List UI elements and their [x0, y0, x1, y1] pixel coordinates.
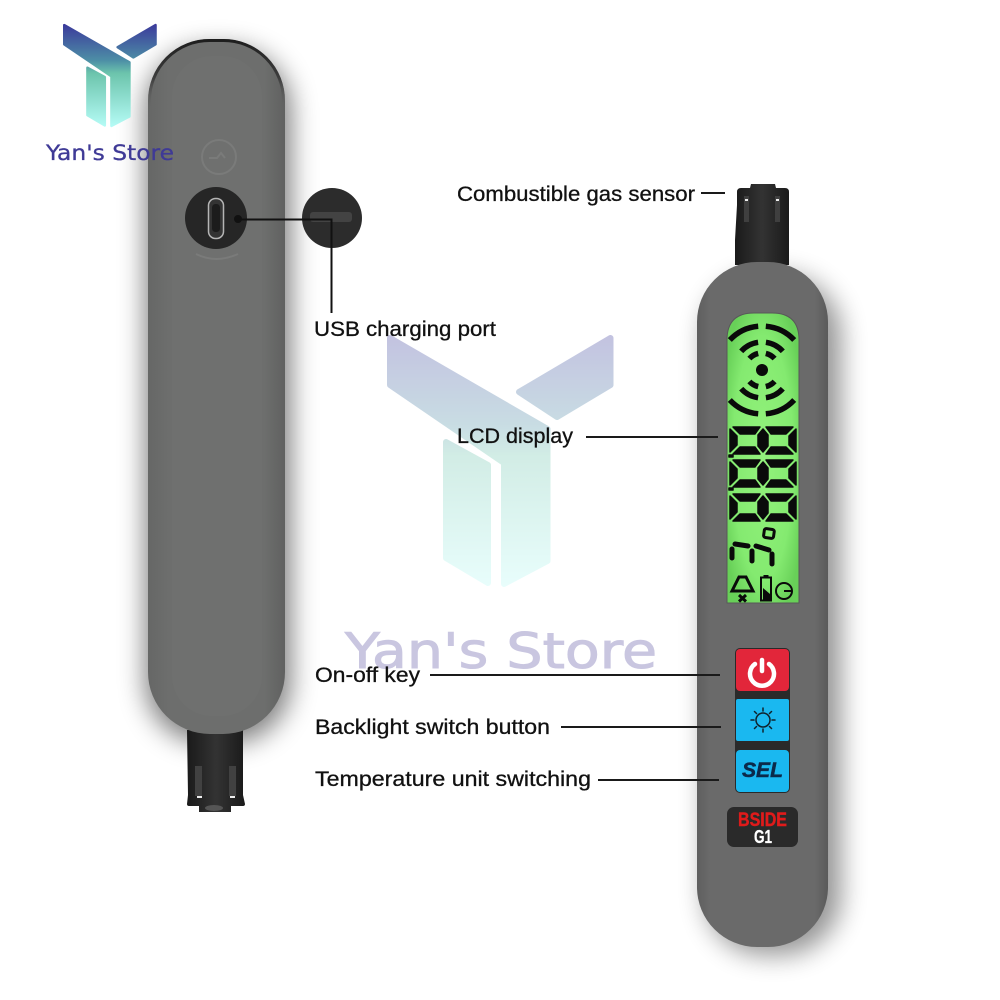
left device: back view	[145, 39, 291, 812]
backlight button	[736, 699, 789, 741]
icon: sun	[751, 708, 775, 732]
icon: muted bell	[732, 577, 753, 602]
left sensor tip	[187, 730, 245, 812]
watermark store name: Yan's Store	[344, 623, 657, 680]
left device body	[148, 39, 285, 734]
brand badge	[727, 807, 798, 847]
label: backlight switch button: Backlight switch button	[315, 716, 550, 739]
top sensor tip	[735, 184, 789, 265]
store logo	[64, 25, 156, 126]
icon: timer	[776, 583, 792, 599]
label: USB charging port: USB charging port	[314, 318, 496, 341]
button panel backing	[735, 648, 790, 793]
USB callout line	[234, 215, 332, 313]
USB port close-up circle	[302, 188, 362, 248]
watermark logo	[390, 338, 610, 584]
LCD screen	[727, 313, 799, 603]
right device: front view	[697, 184, 841, 955]
label: LCD display: LCD display	[457, 425, 574, 448]
store name: Yan's Store	[45, 141, 174, 165]
icon: signal waves	[730, 326, 794, 414]
faint charge icon	[202, 140, 236, 174]
LCD small digits	[732, 544, 772, 564]
right device body	[697, 262, 828, 947]
label: temperature unit switching: Temperature unit switching	[315, 768, 591, 791]
SEL button: SEL	[742, 759, 783, 782]
LCD main digits	[729, 427, 796, 521]
brand badge: G1	[754, 827, 772, 847]
label: on-off key: On-off key	[315, 664, 421, 687]
brand badge: BSIDE	[738, 810, 787, 831]
label: gas sensor: Combustible gas sensor	[457, 183, 695, 206]
LCD degree mark	[763, 528, 775, 539]
icon: power	[750, 660, 774, 686]
icon: battery	[761, 575, 771, 600]
SEL button	[736, 750, 789, 792]
on-off button	[736, 649, 789, 691]
faint arc marking	[196, 254, 238, 259]
USB-C port	[185, 187, 247, 249]
